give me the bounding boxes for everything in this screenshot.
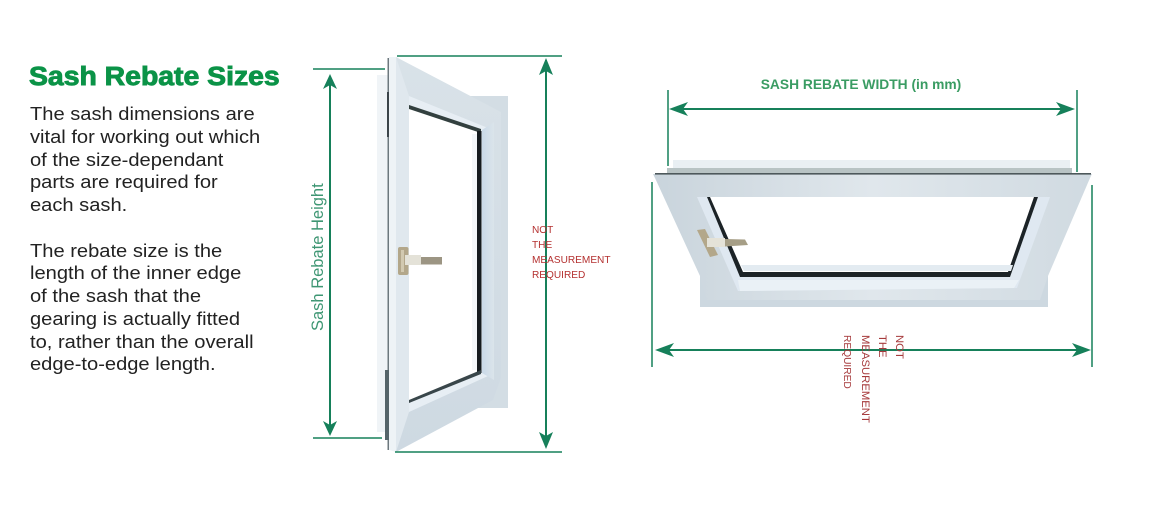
- note: not the measurement required (width): THE: [876, 335, 888, 358]
- label: sash rebate width: SASH REBATE WIDTH (in mm): [761, 77, 961, 92]
- arrow: sash rebate width: [668, 90, 1077, 172]
- text block: rebate size: to, rather than the overall: [30, 332, 254, 353]
- arrow: overall width: [652, 182, 1092, 367]
- text block: sash dimensions: vital for working out which: [30, 127, 260, 148]
- text block: rebate size: [30, 241, 254, 375]
- handle: [697, 229, 748, 257]
- arrow: overall height: [395, 56, 562, 452]
- text block: sash dimensions: each sash.: [30, 195, 127, 216]
- text block: sash dimensions: The sash dimensions are: [30, 104, 255, 125]
- text block: sash dimensions: [30, 104, 260, 216]
- text block: sash dimensions: parts are required for: [30, 172, 218, 193]
- text block: rebate size: edge-to-edge length.: [30, 354, 216, 375]
- note: not the measurement required (height): MEASUREMENT: [532, 255, 611, 266]
- text block: rebate size: gearing is actually fitted: [30, 309, 240, 330]
- text block: rebate size: of the sash that the: [30, 286, 201, 307]
- landscape window: [653, 160, 1092, 307]
- note: not the measurement required (width): MEASUREMENT: [859, 335, 871, 423]
- handle: [398, 247, 442, 275]
- label: sash rebate height: Sash Rebate Height: [309, 183, 327, 331]
- note: not the measurement required (width): REQUIRED: [841, 335, 852, 389]
- arrow: sash rebate height: [313, 69, 385, 438]
- text block: sash dimensions: of the size-dependant: [30, 150, 224, 171]
- text block: rebate size: The rebate size is the: [30, 241, 222, 262]
- note: not the measurement required (height): REQUIRED: [532, 270, 585, 281]
- note: not the measurement required (width): [841, 335, 905, 423]
- portrait window: [377, 57, 508, 452]
- note: not the measurement required (height): [532, 225, 611, 281]
- note: not the measurement required (height): THE: [532, 240, 552, 251]
- title: Sash Rebate Sizes: [29, 61, 280, 91]
- note: not the measurement required (width): NOT: [893, 335, 905, 359]
- text block: rebate size: length of the inner edge: [30, 263, 241, 284]
- note: not the measurement required (height): NOT: [532, 225, 553, 236]
